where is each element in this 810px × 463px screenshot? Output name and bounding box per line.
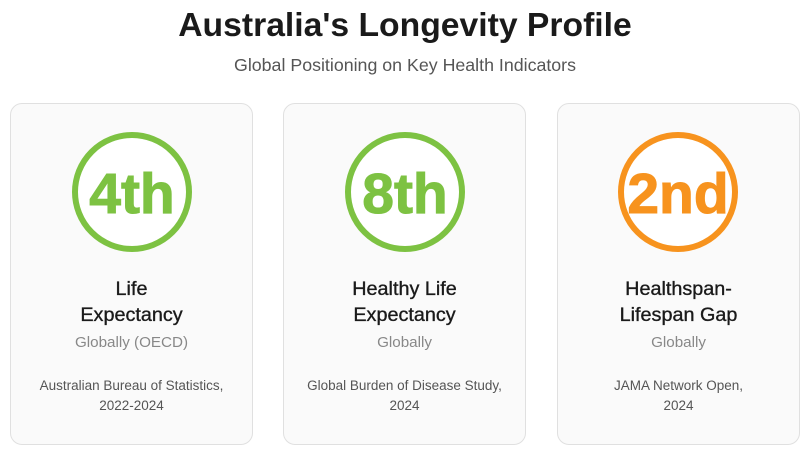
source: JAMA — [614, 378, 743, 413]
source: GBD: Global Burden of Disease Study, — [307, 378, 502, 393]
scope: globally: Globally — [377, 334, 432, 351]
heading: life expectancy: Life — [116, 278, 147, 300]
rank badge: 8th: 8th — [362, 162, 448, 226]
rank badge: 4th — [72, 132, 192, 252]
rank badge: 4th: 4th — [89, 162, 175, 226]
source: ABS: Australian Bureau of Statistics, — [40, 378, 223, 393]
scope: globally (OECD): Globally (OECD) — [75, 334, 188, 351]
source: ABS: 2022-2024 — [99, 398, 164, 413]
title: Australia's Longevity Profile — [178, 6, 632, 44]
heading: healthy life expectancy: Expectancy — [353, 304, 456, 326]
source: JAMA: JAMA Network Open, — [614, 378, 743, 393]
source: GBD: 2024 — [389, 398, 420, 413]
panel: healthspan-lifespan gap — [557, 103, 800, 445]
rank badge: 2nd — [618, 132, 738, 252]
panel: life expectancy — [10, 103, 253, 445]
scope: globally: Globally — [651, 334, 706, 351]
heading: life expectancy: Expectancy — [80, 304, 183, 326]
heading: healthy life expectancy — [352, 278, 457, 326]
heading: healthspan-lifespan gap — [620, 278, 737, 326]
source: JAMA: 2024 — [663, 398, 694, 413]
rank badge: 2nd: 2nd — [627, 162, 729, 226]
heading: healthspan-lifespan gap: Healthspan- — [625, 278, 732, 300]
subtitle: Global Positioning on Key Health Indicators — [234, 55, 576, 75]
panel: healthy life expectancy — [283, 103, 526, 445]
heading: healthspan-lifespan gap: Lifespan Gap — [620, 304, 737, 326]
heading: healthy life expectancy: Healthy Life — [352, 278, 457, 300]
source: GBD — [307, 378, 502, 413]
rank badge: 8th — [345, 132, 465, 252]
heading: life expectancy — [80, 278, 183, 326]
source: ABS — [40, 378, 223, 413]
